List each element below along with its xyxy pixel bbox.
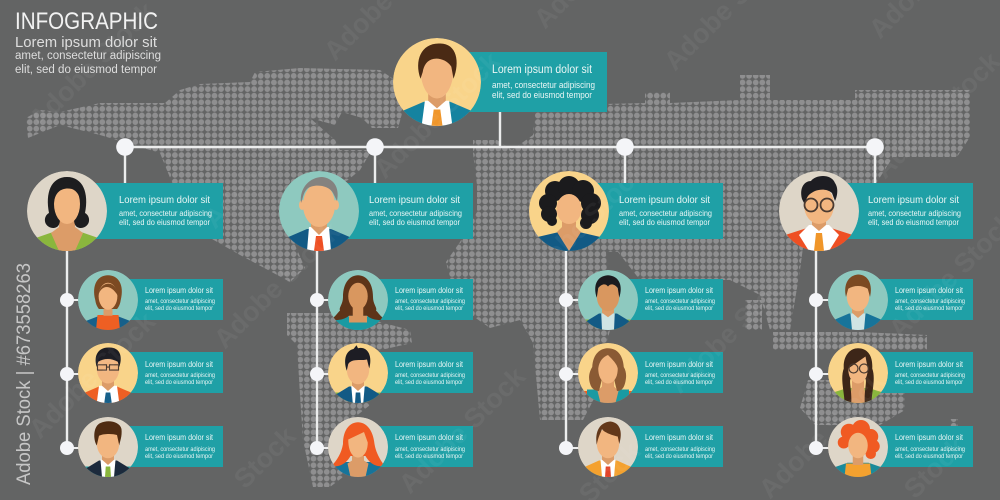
watermark text: Adobe Stock xyxy=(368,46,507,184)
panel: column 3 xyxy=(529,171,723,477)
watermark text: Stock xyxy=(228,420,302,494)
sub-panel: column 3 row 3: elit, sed do eiusmod tempor xyxy=(645,453,713,460)
avatar: woman with black hair xyxy=(27,171,107,251)
avatar: woman with brown wavy hair xyxy=(578,343,638,403)
sub-panel: column 1 row 3: Lorem ipsum dolor sit xyxy=(145,432,214,442)
sub-panel: column 2 row 1 xyxy=(328,270,473,330)
avatar: woman with red hair xyxy=(328,417,388,477)
avatar: man with brown hair and teal jacket xyxy=(828,270,888,330)
sub-panel: column 2 row 2: amet, consectetur adipiscing xyxy=(395,372,465,379)
panel: column 1 xyxy=(27,171,223,477)
column 4 text: amet, consectetur adipiscing xyxy=(868,208,961,218)
subtitle: Lorem ipsum dolor sit xyxy=(15,34,158,51)
avatar: grey-haired man xyxy=(279,171,359,251)
sub-panel: column 1 row 2: amet, consectetur adipiscing xyxy=(145,372,215,379)
top executive text xyxy=(492,80,595,100)
sub-panel: column 4 row 2: amet, consectetur adipiscing xyxy=(895,372,965,379)
intro text line 2: elit, sed do eiusmod tempor xyxy=(15,64,157,76)
column 3 text: elit, sed do eiusmod tempor xyxy=(619,217,710,227)
watermark text: Adobe Stock xyxy=(208,216,347,354)
watermark text: Adobe Stock xyxy=(198,96,337,234)
sub-panel: column 3 row 3 xyxy=(578,417,723,477)
sub-panel: column 1 row 1 xyxy=(78,270,223,330)
column 3 text xyxy=(619,208,712,227)
avatar: man with dark hair and blue jacket xyxy=(578,270,638,330)
sub-panel: column 4 row 3: elit, sed do eiusmod tempor xyxy=(895,453,963,460)
watermark text: Adobe Stock xyxy=(393,361,532,499)
avatar: woman with braids and glasses xyxy=(828,343,888,403)
column 1 text: elit, sed do eiusmod tempor xyxy=(119,217,210,227)
sub-panel: column 2 row 1: Lorem ipsum dolor sit xyxy=(395,285,464,295)
sub-panel: column 4 row 2: elit, sed do eiusmod tempor xyxy=(895,379,963,386)
stock id vertical label: Adobe Stock | #673558263 xyxy=(14,263,35,485)
sub-panel: column 3 row 3: amet, consectetur adipiscing xyxy=(645,446,715,453)
sub-panel: column 3 row 3: Lorem ipsum dolor sit xyxy=(645,432,714,442)
sub-panel: column 1 row 2: elit, sed do eiusmod tempor xyxy=(145,379,213,386)
sub-panel: column 1 row 2 xyxy=(78,343,223,403)
column 2 heading: Lorem ipsum dolor sit xyxy=(369,194,460,206)
top executive heading: Lorem ipsum dolor sit xyxy=(492,64,593,76)
sub-panel: column 4 row 3: amet, consectetur adipiscing xyxy=(895,446,965,453)
panel: top executive xyxy=(393,38,607,126)
sub-panel: column 4 row 2: Lorem ipsum dolor sit xyxy=(895,359,964,369)
avatar: woman with curly black hair xyxy=(529,171,609,251)
sub-panel: column 2 row 2 xyxy=(328,343,473,403)
sub-panel: column 3 row 2 xyxy=(578,343,723,403)
intro text line 1: amet, consectetur adipiscing xyxy=(15,50,161,62)
column 1 heading: Lorem ipsum dolor sit xyxy=(119,194,210,206)
org chart connectors xyxy=(67,112,875,448)
sub-panel: column 3 row 1: elit, sed do eiusmod tempor xyxy=(645,305,713,312)
sub-panel: column 3 row 2: amet, consectetur adipiscing xyxy=(645,372,715,379)
avatar: man with round glasses xyxy=(779,171,859,251)
sub-panel: column 1 row 1: Lorem ipsum dolor sit xyxy=(145,285,214,295)
sub-panel: column 1 row 3 xyxy=(78,417,223,477)
sub-panel: column 3 row 1: amet, consectetur adipiscing xyxy=(645,298,715,305)
avatar: woman with curly orange hair xyxy=(828,417,888,477)
watermark text: Adobe Stock xyxy=(718,91,857,229)
sub-panel: column 1 row 2: Lorem ipsum dolor sit xyxy=(145,359,214,369)
sub-panel: column 3 row 1 xyxy=(578,270,723,330)
sub-panel: column 2 row 2: elit, sed do eiusmod tempor xyxy=(395,379,463,386)
sub-panel: column 2 row 3: amet, consectetur adipiscing xyxy=(395,446,465,453)
sub-panel: column 1 row 1: elit, sed do eiusmod tempor xyxy=(145,305,213,312)
watermark text: Adobe Stock xyxy=(23,0,162,134)
dotted world map xyxy=(26,68,970,487)
sub-panel: column 4 row 2 xyxy=(828,343,973,403)
sub-panel: column 2 row 2: Lorem ipsum dolor sit xyxy=(395,359,464,369)
top executive text: elit, sed do eiusmod tempor xyxy=(492,90,592,100)
column 3 heading: Lorem ipsum dolor sit xyxy=(619,194,710,206)
sub-panel: column 1 row 3: elit, sed do eiusmod tempor xyxy=(145,453,213,460)
title: INFOGRAPHIC xyxy=(15,8,158,35)
connector nodes xyxy=(60,138,884,455)
title block xyxy=(15,8,161,76)
avatar: top executive xyxy=(393,38,481,126)
sub-panel: column 4 row 1: elit, sed do eiusmod tempor xyxy=(895,305,963,312)
avatar: man in blue suit xyxy=(328,343,388,403)
column 4 heading: Lorem ipsum dolor sit xyxy=(868,194,959,206)
sub-panel: column 2 row 3: elit, sed do eiusmod tempor xyxy=(395,453,463,460)
column 4 text: elit, sed do eiusmod tempor xyxy=(868,217,959,227)
sub-panel: column 2 row 1: elit, sed do eiusmod tempor xyxy=(395,305,463,312)
column 1 text xyxy=(119,208,212,227)
panel: column 4 xyxy=(779,171,973,477)
sub-panel: column 4 row 3 xyxy=(828,417,973,477)
avatar: woman with short brown hair xyxy=(78,270,138,330)
column 3 text: amet, consectetur adipiscing xyxy=(619,208,712,218)
sub-panel: column 2 row 1: amet, consectetur adipiscing xyxy=(395,298,465,305)
watermark text: Adobe Stock xyxy=(513,156,652,294)
sub-panel: column 4 row 1 xyxy=(828,270,973,330)
column 2 text xyxy=(369,208,462,227)
watermark text: Adobe Stock xyxy=(663,261,802,399)
avatar: man in dark suit xyxy=(78,417,138,477)
column 2 text: elit, sed do eiusmod tempor xyxy=(369,217,460,227)
sub-panel: column 4 row 1: Lorem ipsum dolor sit xyxy=(895,285,964,295)
column 2 text: amet, consectetur adipiscing xyxy=(369,208,462,218)
sub-panel: column 3 row 2: Lorem ipsum dolor sit xyxy=(645,359,714,369)
watermark text: Adobe Stock xyxy=(23,306,162,444)
avatar: man in orange jacket xyxy=(578,417,638,477)
avatar: woman with long wavy hair xyxy=(328,270,388,330)
sub-panel: column 4 row 3: Lorem ipsum dolor sit xyxy=(895,432,964,442)
sub-panel: column 4 row 1: amet, consectetur adipiscing xyxy=(895,298,965,305)
sub-panel: column 2 row 3: Lorem ipsum dolor sit xyxy=(395,432,464,442)
avatar: man with glasses and orange jacket xyxy=(78,343,138,403)
sub-panel: column 1 row 3: amet, consectetur adipiscing xyxy=(145,446,215,453)
column 4 text xyxy=(868,208,961,227)
sub-panel: column 3 row 2: elit, sed do eiusmod tempor xyxy=(645,379,713,386)
panel: column 2 xyxy=(279,171,473,477)
sub-panel: column 3 row 1: Lorem ipsum dolor sit xyxy=(645,285,714,295)
sub-panel: column 1 row 1: amet, consectetur adipiscing xyxy=(145,298,215,305)
top executive text: amet, consectetur adipiscing xyxy=(492,80,595,90)
sub-panel: column 2 row 3 xyxy=(328,417,473,477)
column 1 text: amet, consectetur adipiscing xyxy=(119,208,212,218)
